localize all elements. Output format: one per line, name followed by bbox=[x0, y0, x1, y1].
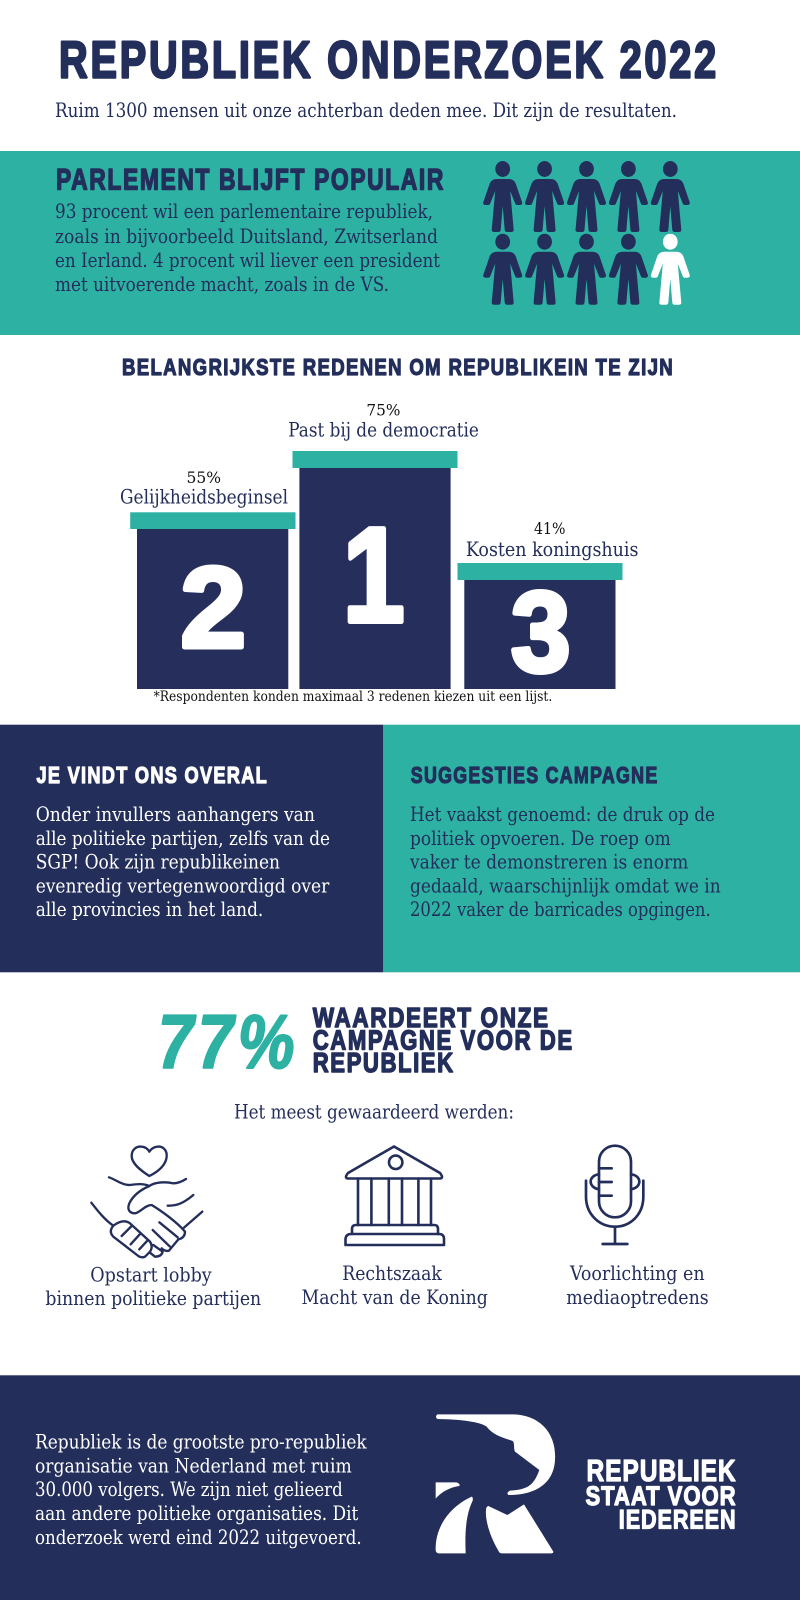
body text: footer: aan andere politieke organisaties. Dit bbox=[35, 1502, 358, 1525]
label: rechtszaak: Rechtszaak bbox=[342, 1262, 442, 1285]
icon: people pictogram 9 of 10 bbox=[483, 161, 690, 305]
podium 1: past bij de democratie: 1 bbox=[343, 500, 405, 650]
panel: je vindt ons overal bbox=[0, 725, 383, 972]
podium 3: kosten koningshuis: Kosten koningshuis bbox=[466, 538, 638, 561]
podium 2: gelijkheidsbeginsel: 55% bbox=[186, 468, 221, 487]
heading: waardeert onze campagne: CAMPAGNE VOOR DE bbox=[313, 1024, 574, 1056]
body text: suggesties: politiek opvoeren. De roep om bbox=[410, 827, 671, 850]
stat: 77 percent: 77% bbox=[158, 1000, 299, 1085]
label: rechtszaak: Macht van de Koning bbox=[302, 1286, 488, 1309]
heading: waardeert onze campagne: WAARDEERT ONZE bbox=[313, 1002, 550, 1033]
subtitle: Ruim 1300 mensen uit onze achterban deden mee. Dit zijn de resultaten. bbox=[55, 99, 677, 122]
logo text: republiek staat voor iedereen: REPUBLIEK bbox=[586, 1454, 736, 1488]
body text: parlement: met uitvoerende macht, zoals in de VS. bbox=[55, 273, 389, 296]
podium 1: past bij de democratie: Past bij de democratie bbox=[288, 419, 479, 442]
heading: waardeert onze campagne: REPUBLIEK bbox=[313, 1047, 455, 1078]
podium 3: kosten koningshuis bbox=[458, 519, 638, 696]
label: rechtszaak bbox=[302, 1262, 488, 1309]
footnote: *Respondenten konden maximaal 3 redenen kiezen uit een lijst. bbox=[154, 689, 552, 705]
body text: suggesties bbox=[409, 803, 721, 921]
heading: parlement: PARLEMENT BLIJFT POPULAIR bbox=[56, 164, 445, 196]
subheading: het meest gewaardeerd: Het meest gewaardeerd werden: bbox=[234, 1100, 514, 1123]
heading: belangrijkste redenen: BELANGRIJKSTE REDENEN OM REPUBLIKEIN TE ZIJN bbox=[122, 354, 674, 380]
body text: overal: evenredig vertegenwoordigd over bbox=[36, 874, 330, 897]
body text: parlement: zoals in bijvoorbeeld Duitsland, Zwitserland bbox=[55, 225, 438, 248]
icon: handshake with heart bbox=[91, 1147, 202, 1257]
icon: microphone bbox=[586, 1146, 643, 1244]
body text: overal: Onder invullers aanhangers van bbox=[36, 803, 315, 826]
body text: footer: Republiek is de grootste pro-republiek bbox=[35, 1430, 367, 1453]
label: voorlichting: Voorlichting en bbox=[569, 1262, 705, 1285]
panel: suggesties campagne bbox=[383, 725, 800, 972]
podium 1: past bij de democratie bbox=[288, 401, 479, 689]
podium chart bbox=[120, 401, 638, 696]
body text: suggesties: 2022 vaker de barricades opgingen. bbox=[410, 898, 711, 921]
body text: overal bbox=[36, 803, 330, 921]
podium 3: kosten koningshuis: 3 bbox=[511, 569, 570, 696]
podium 2: gelijkheidsbeginsel: 2 bbox=[180, 545, 246, 672]
body text: footer: onderzoek werd eind 2022 uitgevoerd. bbox=[35, 1526, 362, 1549]
body text: overal: alle politieke partijen, zelfs van de bbox=[36, 827, 330, 850]
panel: footer bbox=[0, 1375, 800, 1600]
podium 2: gelijkheidsbeginsel bbox=[120, 468, 296, 689]
panel: parlement blijft populair bbox=[0, 151, 800, 335]
heading: waardeert onze campagne bbox=[313, 1002, 574, 1078]
label: opstart lobby: Opstart lobby bbox=[90, 1264, 212, 1287]
body text: footer: organisatie van Nederland met ruim bbox=[35, 1454, 352, 1477]
body text: suggesties: vaker te demonstreren is enorm bbox=[409, 850, 689, 873]
body text: parlement: 93 procent wil een parlementaire republiek, bbox=[55, 200, 433, 223]
body text: parlement bbox=[55, 200, 440, 296]
body text: overal: alle provincies in het land. bbox=[36, 898, 263, 921]
label: voorlichting: mediaoptredens bbox=[566, 1286, 709, 1309]
podium 3: kosten koningshuis: 41% bbox=[534, 519, 565, 538]
podium 1: past bij de democratie: 75% bbox=[366, 401, 400, 420]
body text: parlement: en Ierland. 4 procent wil liever een president bbox=[55, 249, 440, 272]
body text: suggesties: Het vaakst genoemd: de druk op de bbox=[410, 803, 715, 826]
icon: court building bbox=[346, 1146, 444, 1245]
body text: overal: SGP! Ook zijn republikeinen bbox=[36, 850, 280, 873]
body text: suggesties: gedaald, waarschijnlijk omdat we in bbox=[410, 874, 721, 897]
logo text: republiek staat voor iedereen: STAAT VOOR bbox=[586, 1481, 736, 1511]
heading: je vindt ons overal: JE VINDT ONS OVERAL bbox=[36, 762, 268, 788]
label: voorlichting bbox=[566, 1262, 709, 1309]
label: opstart lobby: binnen politieke partijen bbox=[45, 1287, 261, 1310]
heading: suggesties campagne: SUGGESTIES CAMPAGNE bbox=[411, 762, 658, 788]
podium 2: gelijkheidsbeginsel: Gelijkheidsbeginsel bbox=[120, 486, 288, 509]
body text: footer: 30.000 volgers. We zijn niet gelieerd bbox=[35, 1478, 343, 1501]
body text: footer bbox=[35, 1430, 367, 1549]
logo text: republiek staat voor iedereen: IEDEREEN bbox=[619, 1504, 736, 1534]
logo text: republiek staat voor iedereen bbox=[586, 1454, 736, 1534]
label: opstart lobby bbox=[45, 1264, 261, 1310]
logo: republiek R mark bbox=[436, 1414, 555, 1553]
